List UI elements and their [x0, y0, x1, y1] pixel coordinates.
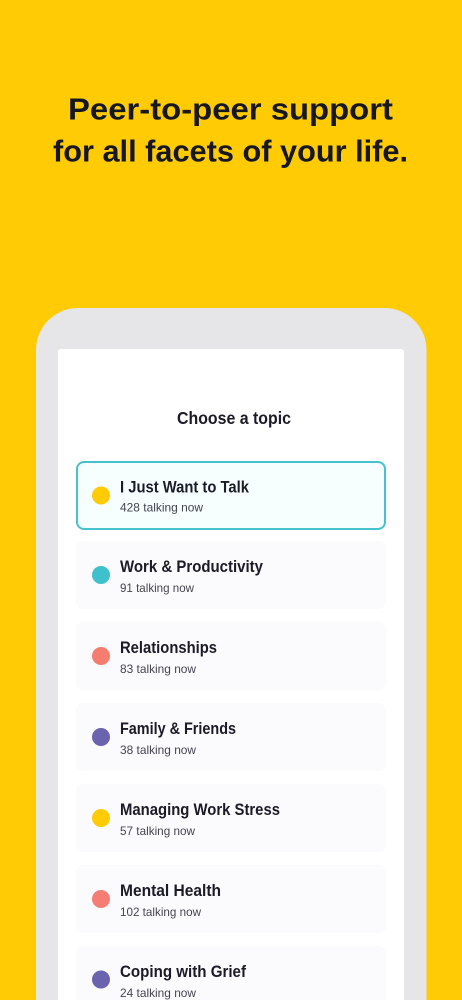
topic card: Work & Productivity — [76, 541, 386, 609]
topic card: Family & Friends: Family & Friends — [120, 720, 236, 738]
topic card: Mental Health: Mental Health — [120, 882, 221, 900]
topic card: I Just Want to Talk (selected) — [77, 462, 385, 529]
topic card: Work & Productivity: Work & Productivity — [120, 558, 264, 576]
topic card: Relationships: 83 talking now — [120, 662, 196, 676]
topic card: Managing Work Stress: 57 talking now — [120, 824, 195, 838]
screen heading: Choose a topic — [177, 408, 291, 428]
topic card: Coping with Grief — [76, 946, 386, 1000]
topic card: Coping with Grief: 24 talking now — [120, 986, 196, 1000]
topic card: Managing Work Stress: Managing Work Stress — [120, 801, 280, 819]
topic card: Relationships: Relationships — [120, 639, 217, 657]
topic card: Family & Friends — [76, 703, 386, 771]
topic card: Mental Health — [76, 865, 386, 933]
topic card: I Just Want to Talk (selected): 428 talking now — [120, 500, 203, 514]
topic card: Mental Health: 102 talking now — [120, 905, 201, 919]
topic card: I Just Want to Talk (selected): I Just Want to Talk — [120, 478, 250, 496]
device frame — [36, 308, 426, 1000]
topic card: Relationships — [76, 622, 386, 690]
topic card: Coping with Grief: Coping with Grief — [120, 963, 246, 981]
title — [53, 92, 408, 168]
topic card: Managing Work Stress — [76, 784, 386, 852]
title: Peer-to-peer support — [68, 92, 393, 126]
title: for all facets of your life. — [53, 134, 408, 168]
topic card: Family & Friends: 38 talking now — [120, 743, 196, 757]
device screen — [58, 349, 404, 1000]
topic card: Work & Productivity: 91 talking now — [120, 581, 194, 595]
